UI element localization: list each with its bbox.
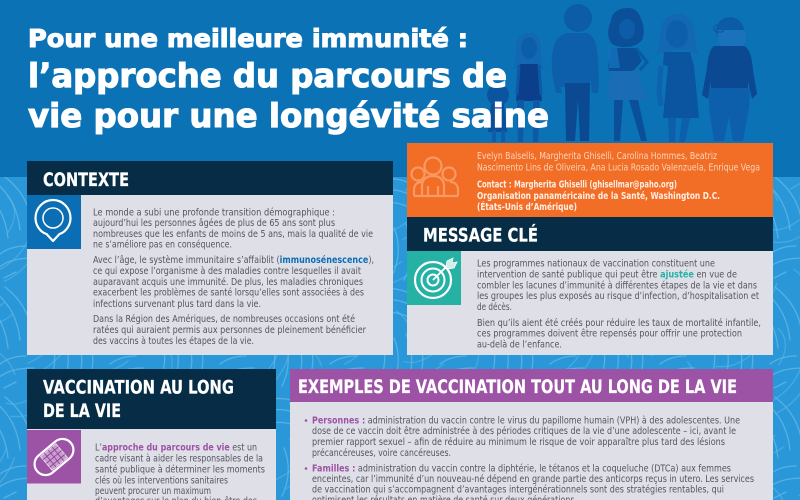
text: contexte body: auparavant acquis une immunité. De plus, les maladies chroniques xyxy=(93,277,363,288)
text: authors xyxy=(477,151,760,174)
text: message clé body: intervention de santé publique qui peut être ajustée en vue de xyxy=(477,270,737,280)
text: contexte body: ratées qui auraient permis aux personnes de pleinement bénéficier xyxy=(93,325,366,336)
text: vaccination body: L’approche du parcours de vie est un xyxy=(95,442,257,454)
text: contexte body: Avec l’âge, le système immunitaire s’affaiblit (immunosénescence), xyxy=(93,255,374,266)
text: contexte body: aujourd’hui les personnes âgées de plus de 65 ans sont plus xyxy=(93,218,335,229)
text: contact: Organisation panaméricaine de la Santé, Washington D.C. xyxy=(477,191,720,202)
heading: vaccination au long de la vie xyxy=(27,369,276,429)
figure: tall man xyxy=(552,4,599,141)
text: message clé body xyxy=(477,258,761,350)
text: contexte body: Dans la Région des Amériques, de nombreuses occasions ont été xyxy=(93,314,355,325)
text: message clé body: de décès. xyxy=(477,302,512,313)
panel: message clé xyxy=(407,217,773,355)
text: message clé body: combler les lacunes d’immunité à différentes étapes de la vie et dans xyxy=(477,280,757,292)
text: vaccination body: clés où les interventions sanitaires xyxy=(95,476,228,486)
heading: contexte xyxy=(27,161,393,195)
panel: contexte xyxy=(27,161,393,355)
text: familles: de vaccination qui s’accompagnent d’avantages intergénérationnels sont des stratégies rentables, qui xyxy=(312,484,724,496)
text: contexte body: ne s’améliore pas en conséquence. xyxy=(93,240,232,250)
figure: girl xyxy=(511,33,545,142)
title: l’approche du parcours de xyxy=(28,56,507,95)
text: contexte body: nombreuses que les enfants de moins de 5 ans, mais la qualité de vie xyxy=(93,229,373,240)
text: contexte body: des vaccins à toutes les étapes de la vie. xyxy=(93,336,254,347)
text: personnes: Personnes : administration du vaccin contre le virus du papillome humain (VPH) à des adolescentes. Une xyxy=(312,416,740,426)
heading: message clé xyxy=(407,217,773,251)
figure: small child xyxy=(487,84,509,142)
title: Pour une meilleure immunité : xyxy=(28,24,468,53)
text: message clé body: Les programmes nationaux de vaccination constituent une xyxy=(477,258,715,270)
header band xyxy=(0,0,800,177)
text: message clé body: au-delà de l’enfance. xyxy=(477,340,562,350)
text: contact: (États-Unis d’Amérique) xyxy=(477,201,577,213)
panel: vaccination au long de la vie xyxy=(27,369,276,500)
text: vaccination body xyxy=(95,442,265,500)
text: familles: Familles : administration du vaccin contre la diphtérie, le tétanos et la coqueluche (DTCa) aux femmes xyxy=(312,464,731,474)
heading: exemples de vaccination xyxy=(290,369,773,402)
text: contexte body: Le monde a subi une profonde transition démographique : xyxy=(93,208,335,218)
heading: contexte: CONTEXTE xyxy=(43,169,129,191)
text: message clé body: ces programmes doivent être repensés pour offrir une protection xyxy=(477,328,742,340)
figure: woman with curly hair xyxy=(607,8,647,141)
text: familles xyxy=(305,464,754,500)
text: contexte body xyxy=(93,208,374,347)
text: personnes: dose de ce vaccin doit être administrée à des périodes critiques de la vie d’une adolescente – ici, avant le xyxy=(312,426,736,437)
panel: exemples de vaccination xyxy=(290,369,773,500)
text: message clé body: les groupes les plus exposés au risque d’infection, d’hospitalisation et xyxy=(477,291,759,302)
icon: target with arrow xyxy=(407,251,461,305)
text: personnes xyxy=(305,416,740,459)
icon: bandage xyxy=(27,430,81,484)
text: personnes: précancéreuses, voire cancéreuses. xyxy=(312,448,451,459)
title xyxy=(28,24,549,135)
text: vaccination body: peuvent procurer un maximum xyxy=(95,486,211,497)
illustration: people of different ages xyxy=(487,4,757,142)
heading: vaccination au long de la vie: VACCINATION AU LONG xyxy=(43,376,234,398)
text: vaccination body: santé publique à déterminer les moments xyxy=(95,464,265,476)
figure: woman with long hair xyxy=(656,14,699,142)
heading: vaccination au long de la vie: DE LA VIE xyxy=(43,400,121,422)
icon: group of people xyxy=(412,158,458,196)
text: vaccination body: cadre visant à aider les responsables de la xyxy=(95,454,263,464)
text: message clé body: Bien qu’ils aient été créés pour réduire les taux de mortalité infantile, xyxy=(477,318,761,329)
text: contact xyxy=(477,180,720,213)
text: authors: Evelyn Balsells, Margherita Ghiselli, Carolina Hommes, Beatriz xyxy=(477,151,717,162)
patterned background xyxy=(0,177,800,500)
text: contexte body: exacerbent les problèmes de santé lorsqu’elles sont associées à des xyxy=(93,288,364,298)
heading: message clé: MESSAGE CLÉ xyxy=(423,224,538,246)
icon: map pin xyxy=(27,195,81,249)
text: contexte body: infections survenant plus tard dans la vie. xyxy=(93,299,261,310)
text: contact: Contact : Margherita Ghiselli (ghisellmar@paho.org) xyxy=(477,180,677,190)
figure: older man with glasses xyxy=(702,17,757,141)
text: personnes: premier rapport sexuel – afin de réduire au minimum le risque de voir apparaître plus tard des lésions xyxy=(312,437,725,448)
text: contexte body: ce qui expose l’organisme à des maladies contre lesquelles il avait xyxy=(93,266,361,277)
title: vie pour une longévité saine xyxy=(28,96,549,135)
panel: authors xyxy=(407,143,773,217)
